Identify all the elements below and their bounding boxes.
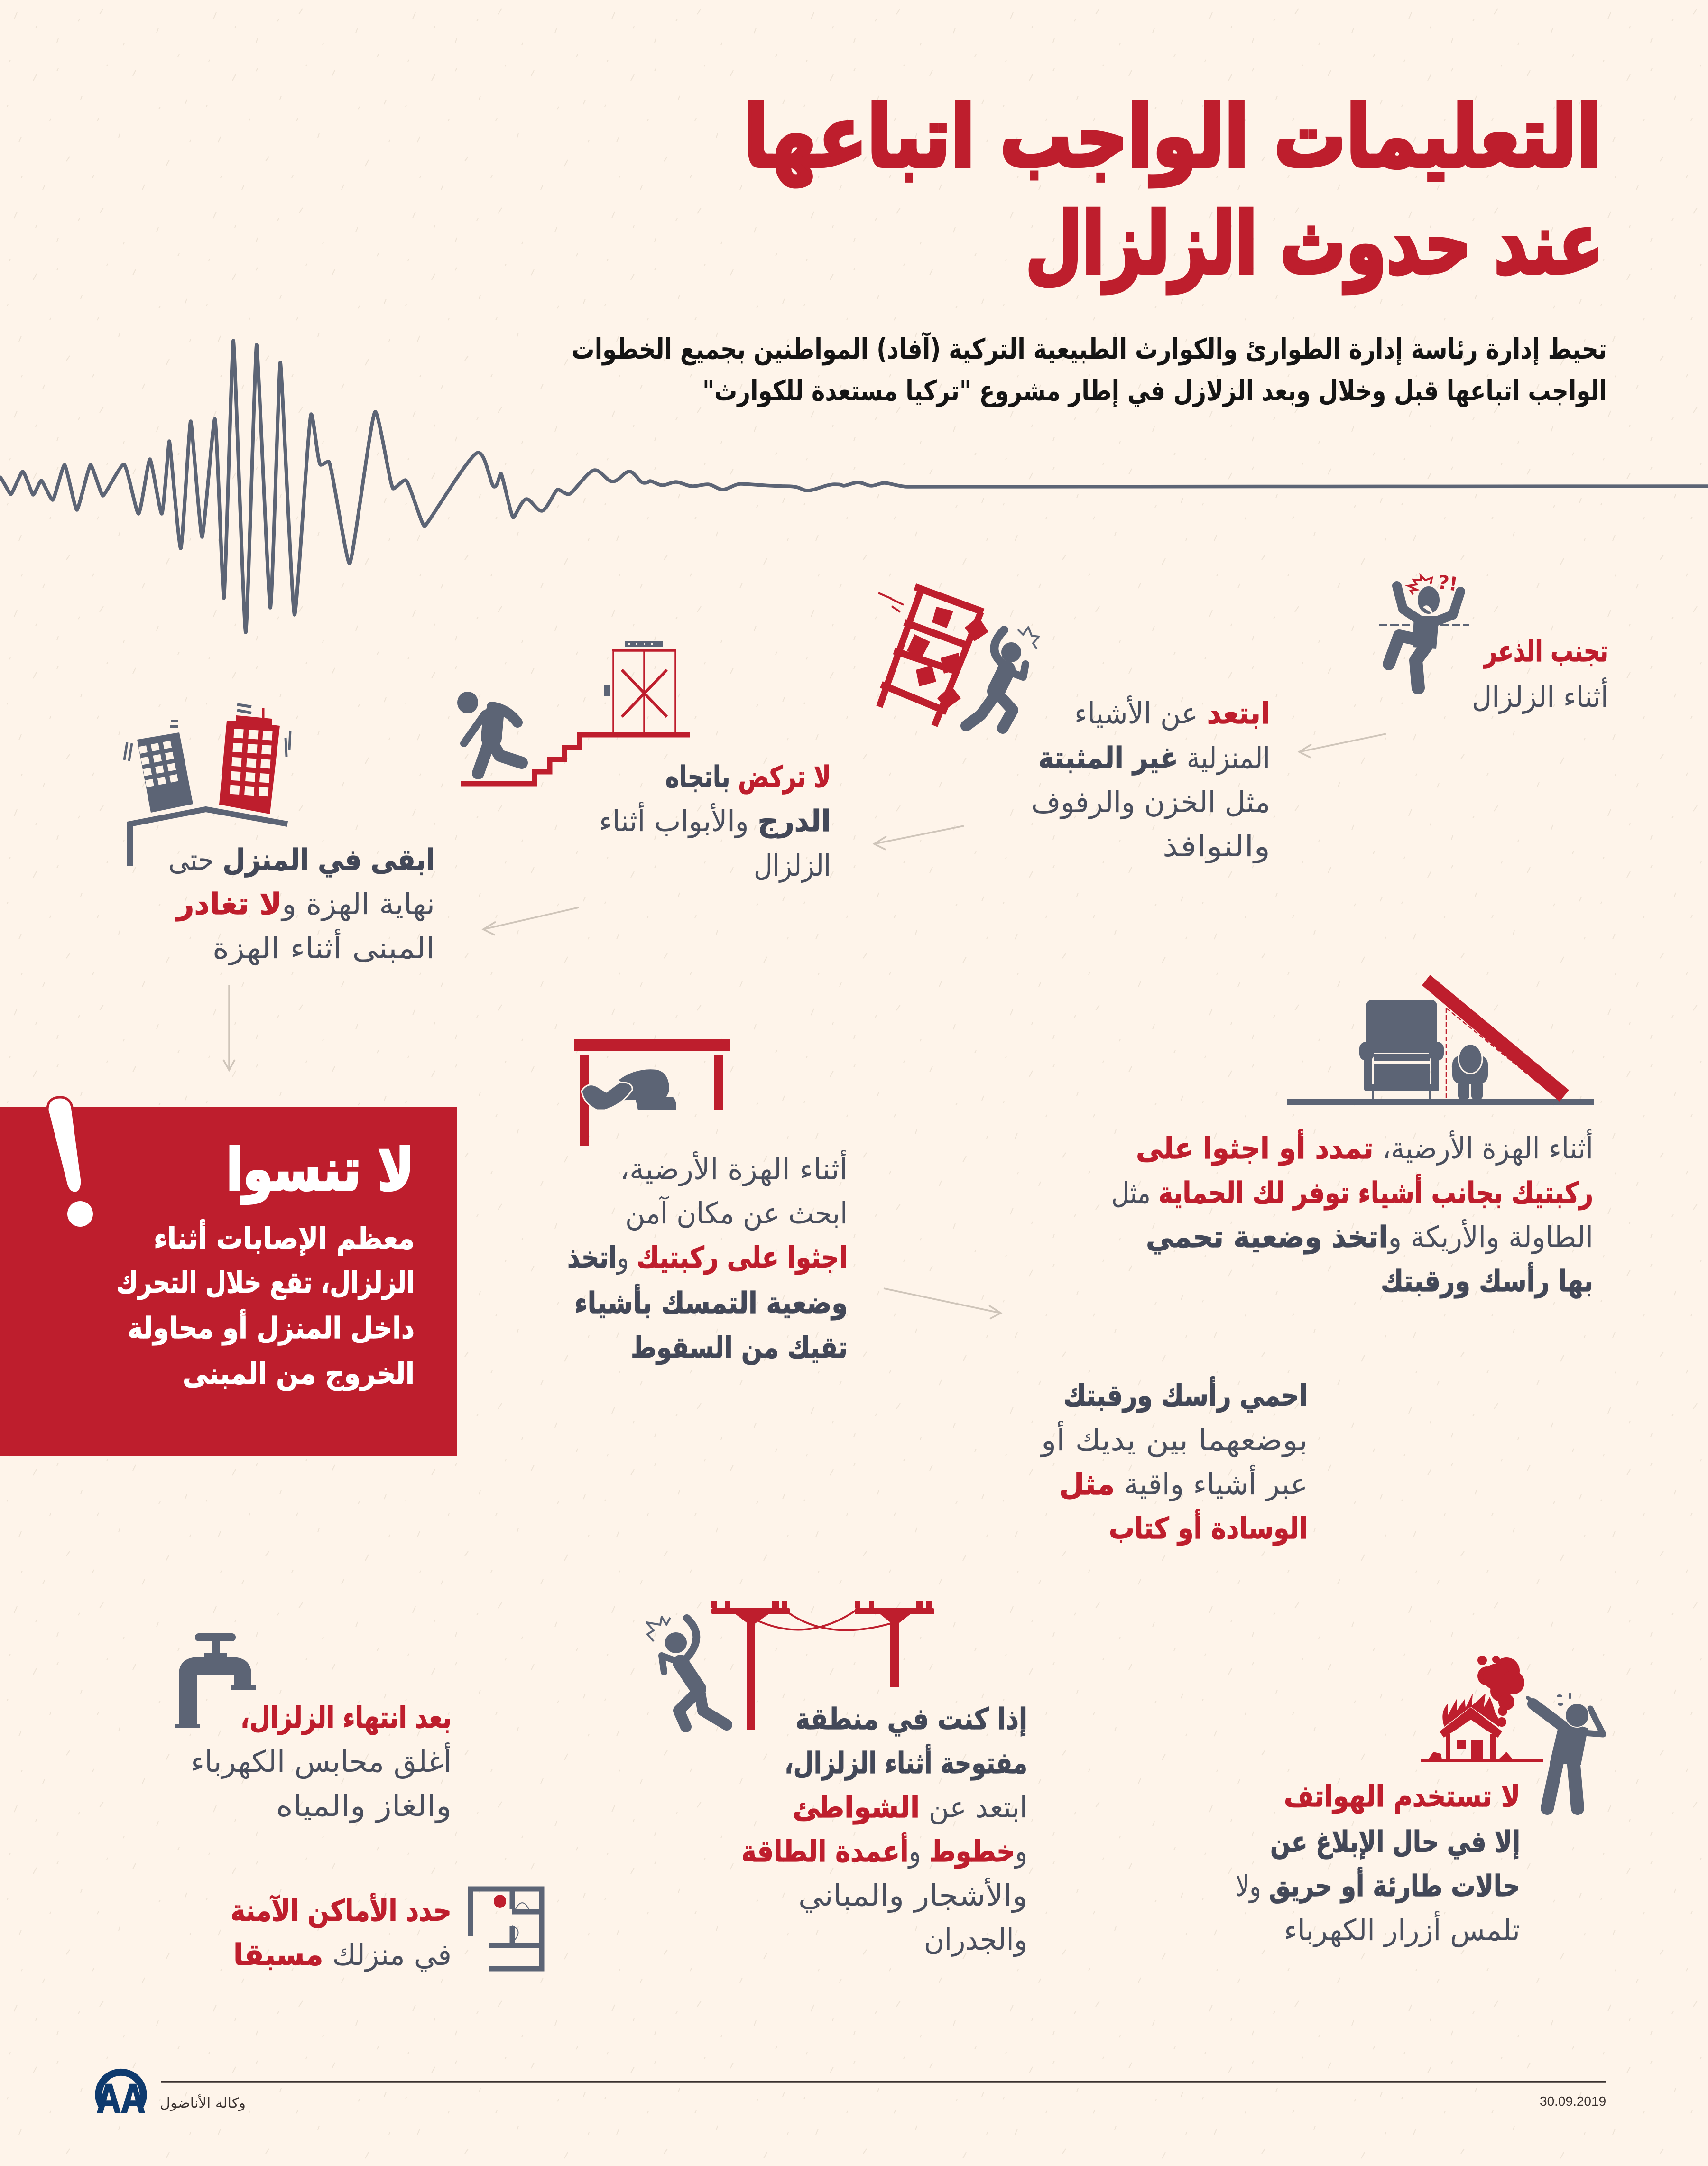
text: protect head and neck: عبر أشياء واقية مثل [1059, 1465, 1308, 1501]
callout text: داخل المنزل أو محاولة [128, 1309, 415, 1345]
intro text [572, 332, 1607, 407]
text: keep away from unstable objects [1031, 695, 1270, 863]
text: keep away from unstable objects: مثل الخزن والرفوف [1031, 785, 1270, 819]
text: under table instructions: ابحث عن مكان آمن [625, 1195, 848, 1231]
icon: falling shelf and person [878, 587, 1039, 728]
text: keep away from unstable objects: والنوافذ [1163, 829, 1270, 863]
arrow [223, 985, 235, 1070]
date: 30.09.2019 [1540, 2094, 1606, 2109]
text: open area instructions: مفتوحة أثناء الزلزال، [785, 1744, 1027, 1780]
icon: person under table [574, 1039, 730, 1146]
text: open area instructions: والأشجار والمباني [798, 1877, 1027, 1913]
icon: panicking person [1379, 571, 1469, 688]
text: under table instructions [567, 1150, 848, 1365]
text: do not use phones: حالات طارئة أو حريق ولا [1236, 1867, 1520, 1903]
callout text: معظم الإصابات أثناء [154, 1219, 415, 1256]
text: under table instructions: تقيك من السقوط [631, 1330, 848, 1365]
icon: armchair, board and crouching person [1287, 975, 1594, 1105]
icon: stairs, elevator and person [457, 641, 690, 784]
text: under table instructions: أثناء الهزة الأرضية، [620, 1150, 848, 1187]
text: locate safe places: حدد الأماكن الآمنة [231, 1893, 452, 1928]
text: after the earthquake: والغاز والمياه [276, 1788, 452, 1823]
text: crouch beside objects: الطاولة والأريكة واتخذ وضعية تحمي [1146, 1219, 1593, 1254]
text: stay indoors: ابقى في المنزل حتى [168, 842, 435, 877]
text: avoid panic: أثناء الزلزال [1472, 677, 1608, 714]
icon: burning house and person with phone [1421, 1656, 1603, 1808]
text: crouch beside objects: بها رأسك ورقبتك [1381, 1262, 1593, 1298]
text: crouch beside objects: أثناء الهزة الأرضية، تمدد أو اجثوا على [1136, 1129, 1593, 1166]
callout text: الخروج من المبنى [183, 1356, 415, 1391]
text: avoid panic: تجنب الذعر [1483, 634, 1608, 668]
text: locate safe places: في منزلك مسبقا [233, 1937, 452, 1972]
text: stay indoors [168, 842, 435, 966]
text: open area instructions: وخطوط وأعمدة الطاقة [741, 1832, 1027, 1869]
text: do not run to stairs: الزلزال [754, 848, 831, 883]
text: stay indoors: نهاية الهزة ولا تغادر [175, 887, 435, 922]
text: protect head and neck [1040, 1376, 1308, 1546]
text: after the earthquake: أغلق محابس الكهرباء [191, 1742, 452, 1779]
text: open area instructions: إذا كنت في منطقة [795, 1702, 1027, 1736]
text: keep away from unstable objects: المنزلية غير المثبتة [1038, 741, 1270, 775]
icon: power lines and person [646, 1601, 934, 1730]
callout text: الزلزال، تقع خلال التحرك [116, 1265, 415, 1300]
callout heading: لا تنسوا [226, 1136, 414, 1204]
text: open area instructions [741, 1702, 1027, 1957]
text: protect head and neck: بوضعهما بين يديك أو [1040, 1421, 1308, 1458]
icon: floor plan [471, 1889, 542, 1969]
text: do not run to stairs: لا تركض باتجاه [665, 759, 831, 795]
seismograph wave [0, 341, 1708, 632]
footer [97, 2072, 1606, 2121]
icon: buildings and roof [124, 704, 290, 866]
text: under table instructions: وضعية التمسك بأشياء [574, 1284, 848, 1320]
callout text [116, 1219, 415, 1391]
icon: panicking person: ?! [1437, 571, 1459, 596]
text: locate safe places [231, 1893, 452, 1972]
text: do not use phones: لا تستخدم الهواتف [1284, 1779, 1520, 1814]
agency name: وكالة الأناضول [160, 2094, 246, 2111]
text: under table instructions: اجثوا على ركبتيك واتخذ [567, 1240, 848, 1275]
arrow [1299, 734, 1386, 758]
text: after the earthquake: بعد انتهاء الزلزال، [240, 1700, 452, 1735]
text: do not run to stairs: الدرج والأبواب أثناء [599, 802, 831, 838]
text: do not use phones [1236, 1779, 1520, 1948]
text: open area instructions: والجدران [924, 1922, 1027, 1957]
text: do not run to stairs [599, 759, 831, 883]
icon: water tap [175, 1633, 256, 1728]
text: protect head and neck: احمي رأسك ورقبتك [1063, 1376, 1308, 1413]
text: do not use phones: إلا في حال الإبلاغ عن [1270, 1824, 1520, 1859]
panel: do not forget [0, 1097, 457, 1456]
text: stay indoors: المبنى أثناء الهزة [212, 929, 435, 966]
icon: exclamation mark [47, 1097, 93, 1227]
text: open area instructions: ابتعد عن الشواطئ [793, 1790, 1027, 1824]
logo: Anadolu Agency: AA [97, 2076, 145, 2121]
title [744, 88, 1603, 294]
text: keep away from unstable objects: ابتعد عن الأشياء [1074, 695, 1270, 731]
arrow [884, 1288, 1001, 1319]
text: protect head and neck: الوسادة أو كتاب [1109, 1509, 1308, 1546]
text: do not use phones: تلمس أزرار الكهرباء [1284, 1911, 1520, 1948]
text: crouch beside objects [1111, 1129, 1593, 1298]
arrow [483, 907, 579, 935]
arrow [874, 826, 964, 850]
text: avoid panic [1472, 634, 1608, 714]
text: after the earthquake [191, 1700, 452, 1823]
text: crouch beside objects: ركبتيك بجانب أشياء توفر لك الحماية مثل [1111, 1174, 1593, 1210]
